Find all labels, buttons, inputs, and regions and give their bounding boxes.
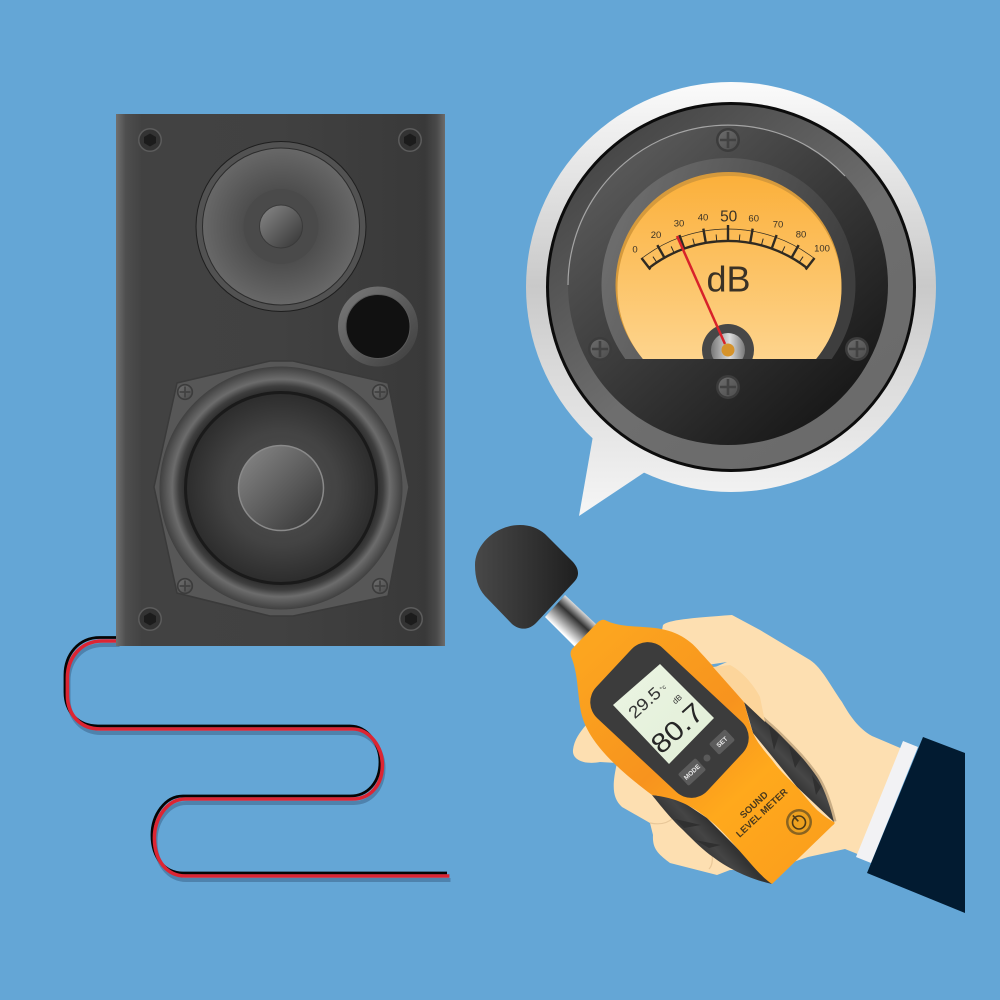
- analog dB gauge: [546, 102, 916, 472]
- sound level meter: [570, 620, 835, 884]
- pivot cap: [722, 344, 734, 356]
- cabinet corner screws: [138, 128, 423, 631]
- microphone foam windscreen: [475, 525, 578, 629]
- lower rubber grip: [652, 795, 772, 884]
- overlapping finger: [713, 665, 765, 722]
- LCD screen: [613, 664, 714, 764]
- gauge scale numbers: 50: [720, 208, 738, 226]
- power button: [786, 809, 812, 835]
- gauge scale numbers: 80: [796, 230, 806, 240]
- temperature unit: °c: [658, 683, 668, 693]
- display bezel: [581, 633, 758, 807]
- orange body: [570, 620, 835, 884]
- needle: [677, 236, 725, 344]
- gauge scale numbers: 70: [773, 220, 783, 230]
- gauge outer bezel: [546, 102, 916, 472]
- SET button: SET: [715, 736, 730, 749]
- shirt cuff: [856, 741, 918, 863]
- needle pivot: [702, 324, 754, 359]
- gauge scale numbers: 40: [698, 212, 708, 224]
- MODE button: [678, 758, 706, 786]
- tweeter: [196, 141, 366, 312]
- gauge scale numbers: 20: [651, 230, 661, 241]
- speaker: [116, 114, 445, 646]
- gauge unit label: dB: [706, 258, 751, 300]
- speaker cabinet: [116, 114, 445, 646]
- palm and wrist: [573, 615, 905, 875]
- gap between fingers: [707, 662, 727, 668]
- hand: [573, 615, 905, 875]
- speaker cable: [65, 638, 450, 880]
- grip tread wedges: [675, 726, 821, 848]
- bass port: [338, 286, 418, 366]
- upper grip shadow: [745, 702, 835, 822]
- suit sleeve: [867, 737, 965, 913]
- finger creases: [650, 818, 712, 869]
- upper rubber grip: [744, 702, 834, 822]
- gauge scale numbers: 30: [674, 218, 684, 230]
- illustration: speaker and sound level meter: [64, 82, 965, 913]
- MODE button: MODE: [683, 763, 702, 782]
- temperature reading: 29.5: [625, 683, 665, 722]
- product label: LEVEL METER: [734, 787, 790, 840]
- gauge scale numbers: 60: [748, 214, 759, 224]
- SET button: [709, 729, 735, 755]
- speech bubble: [526, 82, 936, 516]
- dB unit: dB: [671, 693, 684, 706]
- decibel reading: 80.7: [645, 697, 710, 760]
- gauge dial: [602, 158, 856, 359]
- woofer: [154, 361, 409, 616]
- indicator light: [704, 754, 710, 762]
- gauge scale: [641, 225, 815, 270]
- gauge scale numbers: [632, 208, 830, 256]
- gauge scale numbers: 100: [814, 244, 830, 254]
- gauge screws: [588, 128, 869, 399]
- microphone stem: [545, 595, 597, 649]
- gauge scale numbers: 0: [632, 244, 638, 256]
- product label: SOUND: [738, 790, 771, 821]
